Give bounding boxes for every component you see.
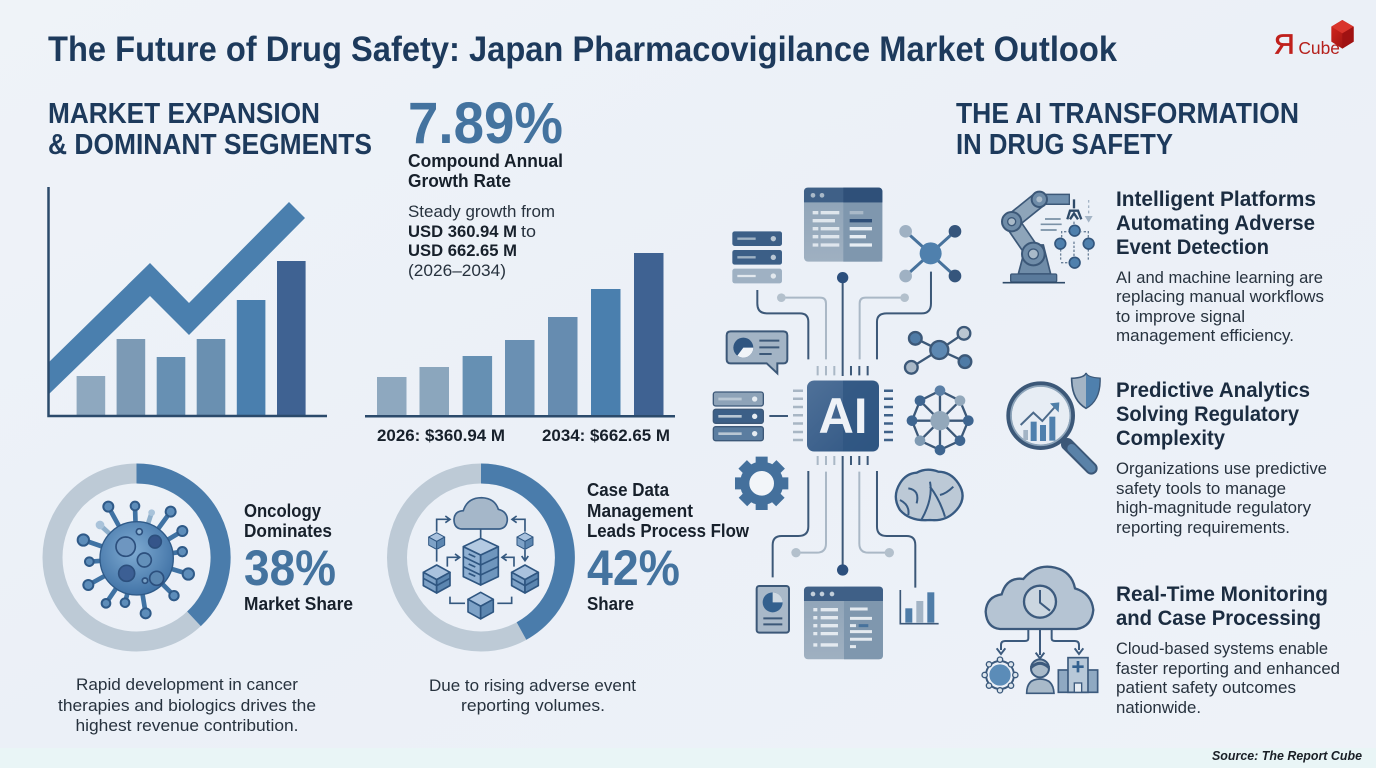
title: The Future of Drug Safety: Japan Pharmacovigilance Market Outlook — [48, 30, 1117, 69]
icon: cloud monitoring — [982, 567, 1098, 693]
text: intelligent platforms: AI and machine learning are — [1116, 268, 1323, 287]
text: real-time monitoring: faster reporting and enhanced — [1116, 659, 1340, 678]
icon: AI chip: AI — [818, 388, 868, 444]
icon: robot arm — [1002, 192, 1094, 283]
text: case data description: reporting volumes. — [461, 696, 605, 715]
heading: AI transformation: IN DRUG SAFETY — [956, 129, 1173, 161]
stat: case data management: Share — [587, 594, 634, 614]
heading: market expansion — [48, 98, 372, 161]
icon: server stack upper — [732, 231, 782, 283]
icon: magnifier with chart and shield — [1009, 373, 1100, 468]
stat: case data management: Case Data — [587, 480, 670, 500]
chart labels — [377, 427, 670, 445]
chart: market size bars 2026 to 2034 — [365, 253, 675, 416]
growth description — [408, 203, 555, 280]
growth description: USD 360.94 M — [408, 223, 517, 241]
text: real-time monitoring: and Case Processing — [1116, 607, 1321, 630]
donut: case data 42% — [397, 474, 565, 642]
icon: server stack left — [713, 392, 788, 441]
CAGR stat: Growth Rate — [408, 171, 511, 191]
text: intelligent platforms: Automating Adverse — [1116, 212, 1315, 235]
text: real-time monitoring: patient safety outcomes — [1116, 678, 1296, 697]
diagram: AI hub (lower half) — [735, 456, 963, 659]
icon: brain — [896, 470, 963, 520]
icon: chat bubble with pie — [727, 331, 787, 373]
logo: RCube: Cube — [1298, 38, 1340, 58]
CAGR stat — [408, 91, 563, 191]
circuit lines top — [757, 272, 931, 376]
growth description: (2026–2034) — [408, 262, 506, 280]
icon: bar chart small — [900, 590, 939, 624]
icon: hub wheel network — [907, 385, 974, 455]
text: predictive analytics: Complexity — [1116, 427, 1225, 450]
stat: case data management: Leads Process Flow — [587, 521, 750, 541]
stat: oncology: 38% — [244, 540, 336, 596]
text: oncology description: Rapid development in cancer — [76, 675, 298, 694]
stat: oncology: Oncology — [244, 501, 321, 521]
text: case data description — [429, 676, 636, 715]
icon: AI chip — [793, 380, 893, 452]
icon: gear — [735, 457, 788, 510]
text: predictive analytics — [1116, 379, 1327, 537]
text: real-time monitoring: Cloud-based systems enable — [1116, 639, 1328, 658]
text: predictive analytics: Predictive Analytics — [1116, 379, 1310, 402]
logo: RCube — [1274, 20, 1354, 59]
icon: report document — [757, 586, 789, 633]
icon: dashboard window top — [804, 188, 882, 262]
stat: oncology: Market Share — [244, 594, 353, 614]
icon: molecule network — [905, 327, 971, 374]
stat: oncology: Dominates — [244, 521, 332, 541]
text: intelligent platforms: Intelligent Platforms — [1116, 188, 1316, 211]
CAGR stat: 7.89% — [408, 91, 563, 156]
text: intelligent platforms: Event Detection — [1116, 236, 1269, 259]
text: oncology description: therapies and biologics drives the — [58, 696, 316, 715]
diagram: AI hub (upper half) — [727, 188, 971, 376]
stat: oncology — [244, 501, 353, 614]
donut: oncology 38% — [52, 473, 221, 642]
stat: case data management: Management — [587, 501, 693, 521]
text: oncology description: highest revenue contribution. — [76, 716, 298, 735]
heading: market expansion: MARKET EXPANSION — [48, 98, 320, 130]
text: predictive analytics: reporting requirements. — [1116, 518, 1290, 537]
text: oncology description — [58, 675, 316, 735]
text: intelligent platforms: management efficiency. — [1116, 326, 1294, 345]
text: case data description: Due to rising adverse event — [429, 676, 636, 695]
text: predictive analytics: Organizations use predictive — [1116, 459, 1327, 478]
growth description: to — [521, 223, 536, 241]
logo: RCube: R — [1274, 28, 1295, 59]
text: intelligent platforms: replacing manual workflows — [1116, 287, 1324, 306]
icon: network node top right — [899, 225, 961, 282]
text: intelligent platforms — [1116, 188, 1324, 345]
text: real-time monitoring: nationwide. — [1116, 698, 1201, 717]
heading: AI transformation: THE AI TRANSFORMATION — [956, 98, 1299, 130]
icon: dashboard window bottom — [804, 587, 883, 659]
CAGR stat: Compound Annual — [408, 151, 563, 171]
chart labels: 2034: $662.65 M — [542, 427, 670, 445]
source note: Source: The Report Cube — [1212, 749, 1362, 763]
chart labels: 2026: $360.94 M — [377, 427, 505, 445]
growth description: Steady growth from — [408, 203, 555, 221]
growth description: USD 662.65 M — [408, 242, 517, 260]
heading: market expansion: & DOMINANT SEGMENTS — [48, 129, 372, 161]
circuit lines bottom — [773, 456, 915, 588]
text: intelligent platforms: to improve signal — [1116, 307, 1245, 326]
stat: case data management: 42% — [587, 540, 680, 596]
text: predictive analytics: high-magnitude regulatory — [1116, 498, 1311, 517]
chart: segment growth bars with trend arrow — [48, 187, 327, 416]
stat: case data management — [587, 480, 750, 614]
icon: virus cell — [78, 502, 194, 618]
text: predictive analytics: safety tools to manage — [1116, 479, 1286, 498]
text: real-time monitoring: Real-Time Monitoring — [1116, 583, 1328, 606]
text: real-time monitoring — [1116, 583, 1340, 717]
text: predictive analytics: Solving Regulatory — [1116, 403, 1299, 426]
heading: AI transformation — [956, 98, 1299, 161]
icon: data flow servers and cloud — [423, 498, 538, 619]
